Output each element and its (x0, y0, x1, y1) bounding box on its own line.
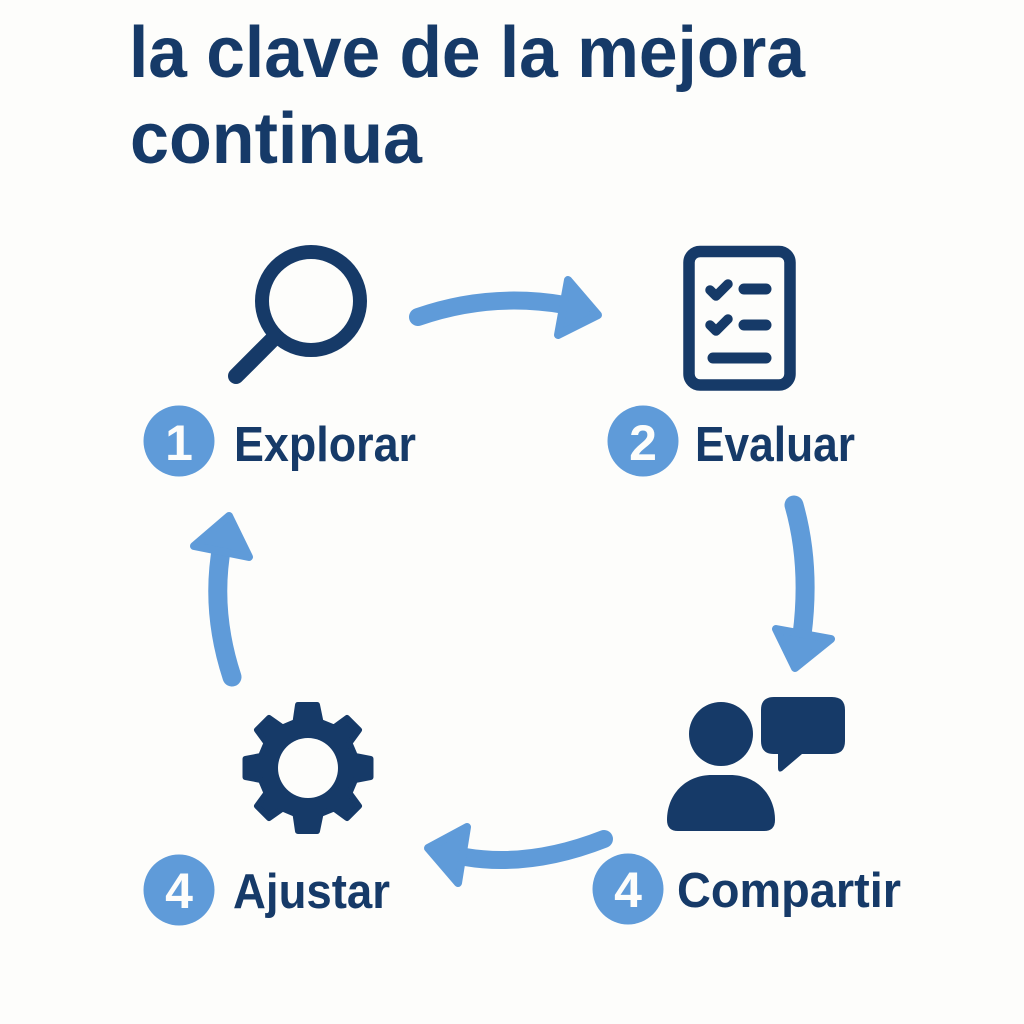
arrow: compartir to ajustar (428, 827, 604, 883)
step 2 label: 2 (629, 415, 657, 471)
step 1 label (144, 406, 416, 476)
arrow: evaluar to compartir (776, 505, 831, 668)
icon: magnifying glass (236, 252, 360, 376)
step 4 label: ajustar (144, 854, 390, 926)
step 4 label: compartir: 4 (614, 862, 642, 918)
step 2 label (608, 406, 855, 476)
step 4 label: compartir: Compartir (677, 864, 901, 918)
step 4 label: compartir (592, 854, 901, 924)
title (129, 13, 806, 179)
step 2 label: Evaluar (695, 418, 855, 472)
arrow: ajustar to explorar (194, 516, 249, 677)
step 1 label: 1 (165, 415, 193, 471)
icon: checklist (689, 252, 790, 385)
title: continua (130, 99, 423, 179)
step 4 label: ajustar: Ajustar (233, 865, 390, 919)
icon: gear (246, 705, 370, 831)
step 1 label: Explorar (234, 418, 416, 472)
title: la clave de la mejora (129, 13, 806, 93)
arrow: explorar to evaluar (418, 280, 598, 335)
icon: person with speech bubble (667, 697, 845, 831)
step 4 label: ajustar: 4 (165, 863, 193, 919)
